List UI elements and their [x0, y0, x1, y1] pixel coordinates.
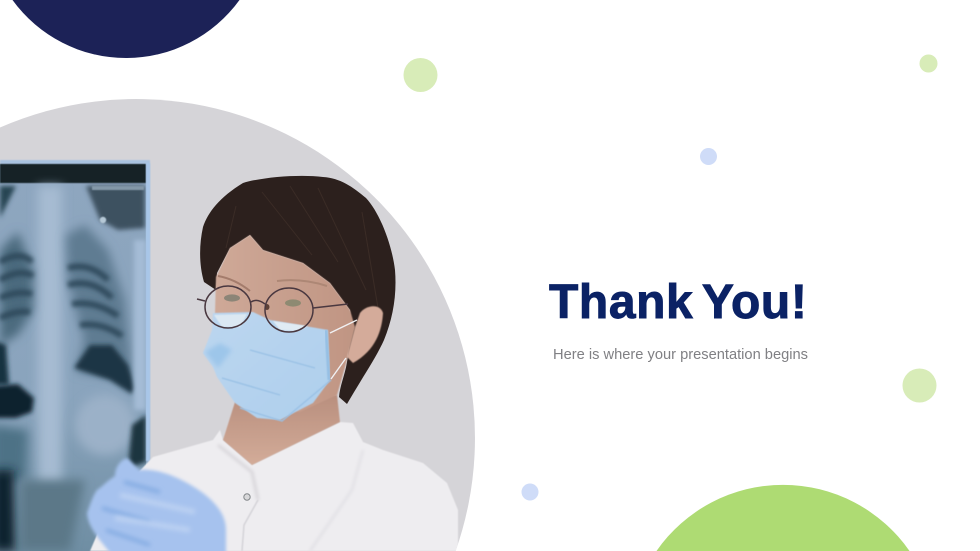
subtitle: Here is where your presentation begins — [553, 347, 808, 363]
gloved hand — [87, 458, 226, 551]
lower right lung shadow — [74, 345, 135, 394]
ear — [347, 306, 383, 363]
lung right — [66, 225, 133, 392]
eyes and brows — [218, 276, 327, 310]
finger gaps — [102, 482, 160, 545]
decorative dot: light green top right — [920, 54, 938, 72]
face — [214, 235, 355, 412]
decorative circle: navy top — [12, 0, 240, 58]
doctor's coat — [90, 422, 458, 551]
hair strands — [226, 186, 378, 307]
spine highlight — [38, 186, 62, 486]
photo background wall — [0, 95, 480, 551]
hair — [200, 176, 396, 404]
coat button — [244, 494, 250, 500]
title: Thank You! — [549, 276, 807, 329]
coat collar shadow — [218, 445, 258, 500]
decorative circle: green bottom — [656, 485, 910, 551]
lung left — [0, 232, 33, 350]
decorative dot: light blue bottom — [522, 484, 538, 500]
lower left tones — [0, 425, 28, 480]
ear loops — [330, 320, 357, 379]
decorative dot: light green right — [902, 368, 936, 402]
glasses — [197, 286, 348, 332]
rib shadows — [0, 256, 122, 336]
lower left dark blob — [0, 384, 34, 418]
face mask — [203, 312, 357, 421]
x-ray film — [0, 160, 150, 551]
neck — [223, 395, 340, 465]
abdomen — [75, 395, 135, 455]
decorative dot: light blue top — [700, 148, 717, 165]
photo: doctor examining an x-ray in a circular crop — [0, 95, 480, 551]
decorative dot: light green top — [404, 58, 438, 92]
